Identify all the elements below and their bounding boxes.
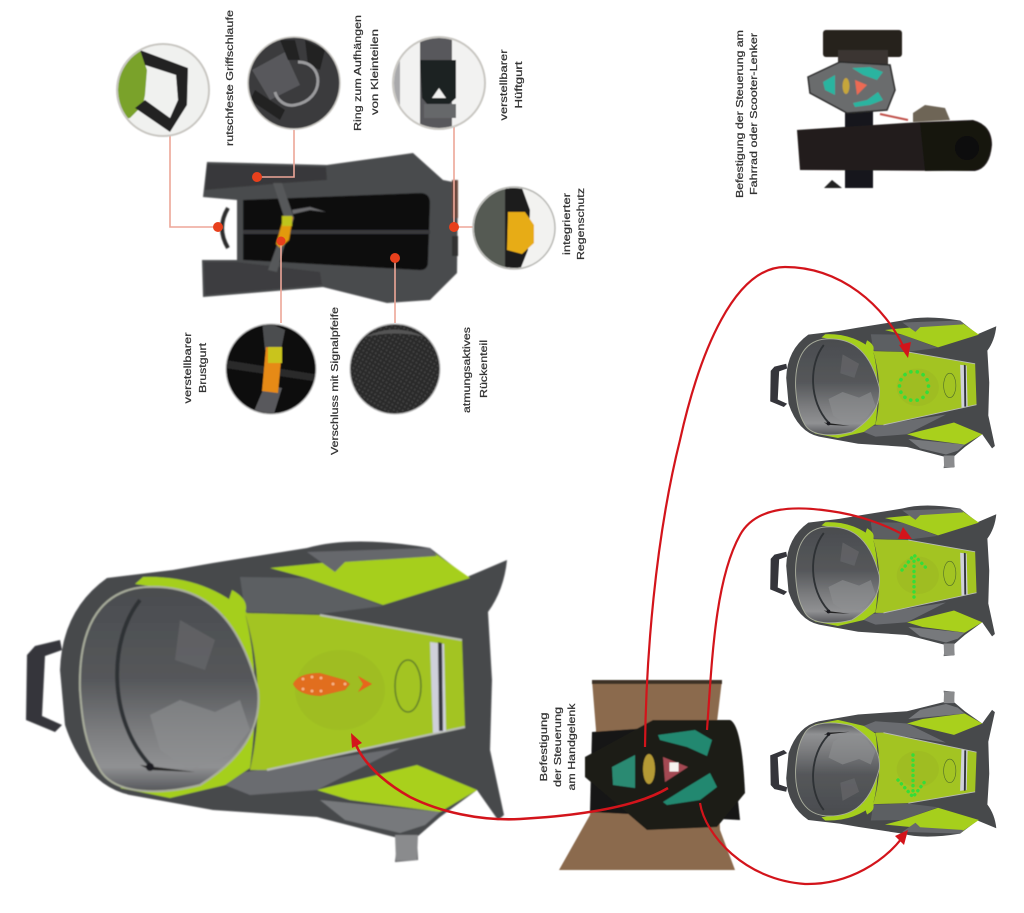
- panel: handlebar mount: [734, 30, 992, 198]
- backpack: green down arrow: [770, 691, 996, 837]
- LED down arrow: [898, 755, 926, 797]
- backpack: green straight arrow: [770, 506, 996, 656]
- backpack: green circle signal: [770, 318, 996, 468]
- photo: handlebar controller: [797, 30, 992, 188]
- label: hip belt: Hüftgurt: [513, 61, 525, 108]
- label: wrist mount: am Handgelenk: [566, 703, 578, 790]
- back of backpack: [202, 153, 458, 303]
- label: ring: [352, 15, 381, 131]
- label: handle: rutschfeste Griffschlaufe: [224, 10, 236, 146]
- label: wrist mount: [538, 703, 578, 790]
- arrow: center button to circle signal: [645, 267, 911, 747]
- panel: wrist controller: [538, 680, 745, 870]
- label: hip belt: [498, 49, 525, 120]
- LED up arrow: [902, 555, 928, 597]
- label: handlebar mount: Fahrrad oder Scooter-Lenker: [748, 32, 760, 195]
- label: wrist mount: Befestigung: [538, 712, 550, 782]
- label: whistle buckle: Verschluss mit Signalpfeife: [329, 307, 341, 455]
- panel: back view with feature callouts: [117, 10, 587, 455]
- label: ring: von Kleinteilen: [369, 29, 381, 115]
- detail: hip belt buckle: [393, 35, 485, 131]
- label: chest strap: verstellbarer: [182, 332, 194, 404]
- label: chest strap: Brustgurt: [197, 343, 209, 393]
- label: chest strap: [182, 332, 209, 404]
- arrow: right button to straight arrow signal: [707, 508, 912, 730]
- main backpack with orange LED signal: [26, 542, 507, 862]
- detail: handle: [117, 44, 209, 136]
- label: hip belt: verstellbarer: [498, 49, 510, 120]
- callout dots: [213, 172, 459, 263]
- label: ring: Ring zum Aufhängen: [352, 15, 364, 131]
- label: wrist mount: der Steuerung: [552, 707, 564, 787]
- detail: rain cover: [470, 185, 555, 275]
- LED: orange arrow: [293, 673, 372, 696]
- detail: ring: [248, 37, 340, 129]
- label: handlebar mount: [734, 30, 760, 198]
- callout lines: [170, 127, 473, 323]
- photo: wrist with remote: [559, 680, 745, 870]
- detail: chest buckle: [225, 323, 317, 416]
- arrow: stop button to main backpack: [351, 733, 668, 819]
- label: back panel: Rückenteil: [478, 340, 490, 398]
- arrow: left button to down arrow signal: [700, 803, 908, 884]
- detail: breathable mesh: [350, 324, 440, 414]
- label: rain cover: [561, 188, 587, 260]
- label: rain cover: Regenschutz: [575, 188, 587, 260]
- label: back panel: atmungsaktives: [461, 327, 473, 413]
- label: handlebar mount: Befestigung der Steuerung am: [734, 30, 746, 198]
- label: back panel: [461, 327, 490, 413]
- label: rain cover: integrierter: [561, 192, 573, 255]
- LED ring: [900, 372, 928, 400]
